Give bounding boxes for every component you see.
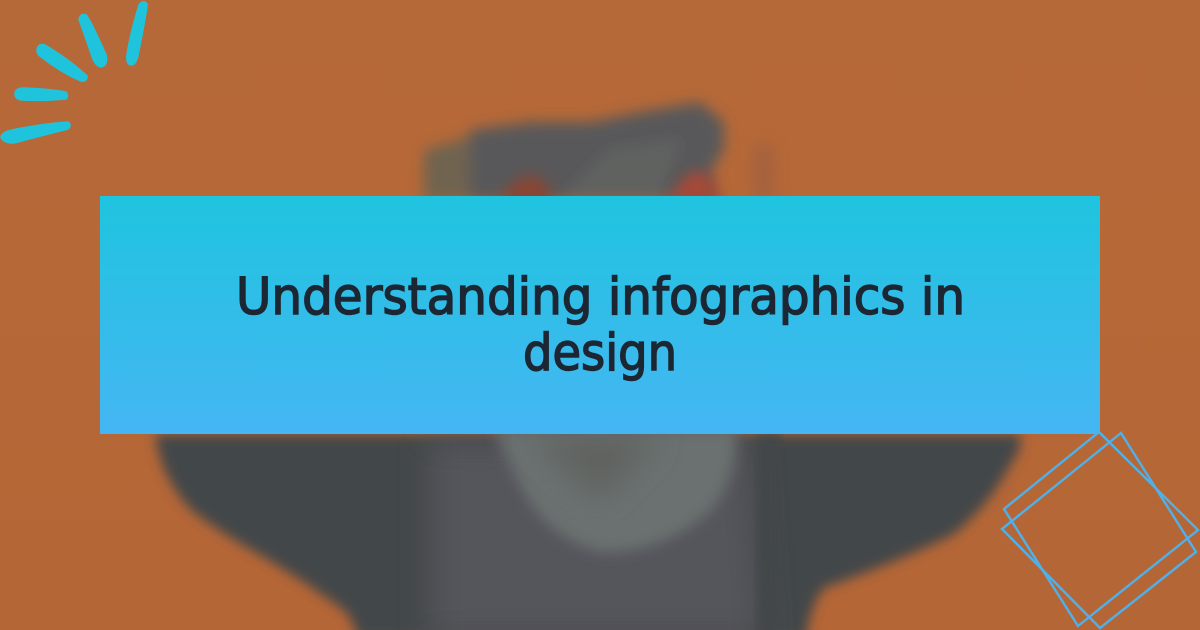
title line 2: design — [523, 324, 677, 383]
blurred photo: person — [155, 102, 1020, 630]
blurred collar — [495, 428, 736, 552]
blurred dark shirt stripe — [758, 434, 780, 630]
panel: title banner — [100, 196, 1100, 434]
blurred collar fold — [530, 434, 660, 500]
icon: burst of cyan strokes — [1, 2, 147, 143]
blurred shirt — [430, 440, 765, 630]
blurred hoodie — [155, 434, 1020, 630]
blurred hat — [424, 102, 775, 200]
title — [236, 268, 965, 383]
icon: overlapping outlined squares — [1002, 432, 1198, 628]
title line 1: Understanding infographics in — [236, 268, 965, 327]
blurred red glasses — [500, 170, 722, 204]
